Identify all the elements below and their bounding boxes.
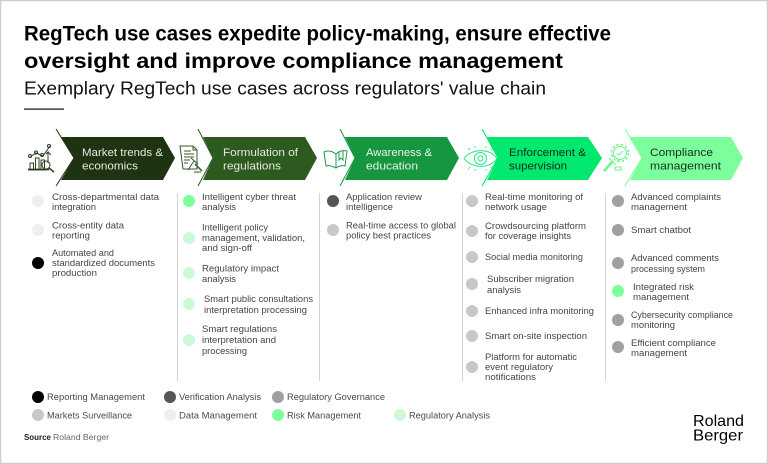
legend bbox=[32, 391, 491, 421]
column: Formulation of regulations use cases: interpretation and bbox=[202, 335, 276, 345]
column: Awareness & education use cases bbox=[327, 192, 456, 240]
title: RegTech use cases expedite policy-making, ensure effective bbox=[24, 22, 611, 46]
legend: Regulatory Governance bbox=[287, 392, 385, 402]
chevron: Formulation of regulations: regulations bbox=[223, 160, 282, 172]
column: Awareness & education use cases: Application review bbox=[346, 192, 423, 202]
column: Compliance management use cases: management bbox=[633, 292, 690, 302]
column: Enforcement & supervision use cases bbox=[466, 192, 594, 382]
column: Enforcement & supervision use cases: for coverage insights bbox=[485, 231, 572, 241]
column: Compliance management use cases: Cybersecurity compliance bbox=[631, 310, 733, 320]
icon: gear with gavel bbox=[604, 144, 628, 171]
column: Compliance management use cases: processing system bbox=[631, 264, 705, 274]
column: Formulation of regulations use cases: analysis bbox=[202, 202, 237, 212]
column: Enforcement & supervision use cases: event regulatory bbox=[485, 362, 554, 372]
legend: Reporting Management bbox=[47, 392, 146, 402]
column: Formulation of regulations use cases: processing bbox=[202, 346, 247, 356]
chevron: Awareness & education: education bbox=[366, 160, 418, 172]
column: Enforcement & supervision use cases: Subscriber migration bbox=[487, 274, 574, 284]
column: Awareness & education use cases: policy best practices bbox=[346, 230, 432, 240]
column: Formulation of regulations use cases: Intelligent policy bbox=[202, 222, 269, 232]
chevron: Awareness & education: Awareness & bbox=[366, 147, 433, 159]
column: Compliance management use cases: Advanced complaints bbox=[631, 192, 722, 202]
column: Formulation of regulations use cases: Regulatory impact bbox=[202, 264, 280, 274]
chevron: Enforcement & supervision: Enforcement & bbox=[509, 147, 587, 159]
icon: market chart with magnifier bbox=[28, 144, 54, 172]
icon: document with gavel bbox=[180, 146, 202, 172]
chevron: Formulation of regulations bbox=[198, 129, 317, 186]
column: Enforcement & supervision use cases: Real-time monitoring of bbox=[485, 192, 584, 202]
column: Compliance management use cases: Advanced comments bbox=[631, 253, 720, 263]
column: Enforcement & supervision use cases: notifications bbox=[485, 372, 537, 382]
logo: Roland Berger: Berger bbox=[693, 428, 744, 444]
column: Enforcement & supervision use cases: Social media monitoring bbox=[485, 252, 583, 262]
title: oversight and improve compliance management bbox=[24, 49, 563, 73]
column: Market trends & economics use cases: reporting bbox=[52, 230, 90, 240]
chevron: Enforcement & supervision: supervision bbox=[509, 160, 567, 172]
column: Formulation of regulations use cases: Intelligent cyber threat bbox=[202, 192, 297, 202]
column: Enforcement & supervision use cases: Enhanced infra monitoring bbox=[485, 306, 594, 316]
column: Formulation of regulations use cases: analysis bbox=[202, 274, 237, 284]
column: Market trends & economics use cases: standardized documents bbox=[52, 258, 156, 268]
column: Awareness & education use cases: intelligence bbox=[346, 202, 393, 212]
subtitle: Exemplary RegTech use cases across regulators' value chain bbox=[24, 78, 546, 98]
chevron: Market trends & economics: economics bbox=[82, 160, 139, 172]
column: Compliance management use cases: Integrated risk bbox=[633, 282, 695, 292]
chevron: Awareness & education bbox=[340, 129, 459, 186]
column: Market trends & economics use cases: Automated and bbox=[52, 248, 114, 258]
chevron: Compliance management: management bbox=[650, 160, 721, 172]
chevron: Formulation of regulations: Formulation of bbox=[223, 147, 299, 159]
chevron: Compliance management bbox=[625, 129, 743, 186]
legend: Regulatory Analysis bbox=[409, 410, 491, 420]
column: Enforcement & supervision use cases: Crowdsourcing platform bbox=[485, 221, 586, 231]
column: Market trends & economics use cases: Cross-departmental data bbox=[52, 192, 159, 202]
column: Market trends & economics use cases: integration bbox=[52, 202, 96, 212]
column: Awareness & education use cases: Real-time access to global bbox=[346, 220, 456, 230]
title bbox=[24, 22, 611, 73]
column: Formulation of regulations use cases bbox=[183, 192, 314, 356]
source: Source bbox=[24, 432, 51, 442]
logo: Roland Berger: Roland bbox=[693, 413, 744, 430]
legend: Data Management bbox=[179, 410, 258, 420]
column: Market trends & economics use cases: production bbox=[52, 268, 97, 278]
chevron: Compliance management: Compliance bbox=[650, 147, 713, 159]
column: Compliance management use cases: monitoring bbox=[631, 320, 675, 330]
column: Formulation of regulations use cases: and sign-off bbox=[202, 243, 253, 253]
column: Enforcement & supervision use cases: network usage bbox=[485, 202, 547, 212]
chevron: Enforcement & supervision bbox=[482, 129, 602, 186]
logo: Roland Berger bbox=[693, 413, 744, 444]
source: Roland Berger bbox=[53, 432, 109, 442]
column: Enforcement & supervision use cases: Platform for automatic bbox=[485, 352, 578, 362]
column: Compliance management use cases bbox=[612, 192, 733, 358]
column: Compliance management use cases: management bbox=[631, 202, 688, 212]
column: Enforcement & supervision use cases: Smart on-site inspection bbox=[485, 331, 587, 341]
chevron: Market trends & economics: Market trends & bbox=[82, 147, 164, 159]
column: Compliance management use cases: management bbox=[631, 348, 688, 358]
legend: Markets Surveillance bbox=[47, 410, 132, 420]
column: Market trends & economics use cases: Cross-entity data bbox=[52, 220, 124, 230]
column: Formulation of regulations use cases: management, validation, bbox=[202, 233, 305, 243]
column: Compliance management use cases: Efficient compliance bbox=[631, 338, 716, 348]
icon: eye bbox=[464, 146, 497, 171]
source bbox=[24, 432, 109, 442]
column: Market trends & economics use cases bbox=[32, 192, 159, 278]
icon: open book bbox=[324, 151, 347, 168]
column: Formulation of regulations use cases: Smart regulations bbox=[202, 324, 278, 334]
dividers bbox=[178, 193, 606, 381]
legend: Verification Analysis bbox=[179, 392, 262, 402]
column: Formulation of regulations use cases: interpretation processing bbox=[204, 305, 307, 315]
legend: Risk Management bbox=[287, 410, 361, 420]
column: Formulation of regulations use cases: Smart public consultations bbox=[204, 294, 314, 304]
chevron: Market trends & economics bbox=[56, 129, 175, 186]
column: Enforcement & supervision use cases: analysis bbox=[487, 285, 522, 295]
column: Compliance management use cases: Smart chatbot bbox=[631, 225, 692, 235]
